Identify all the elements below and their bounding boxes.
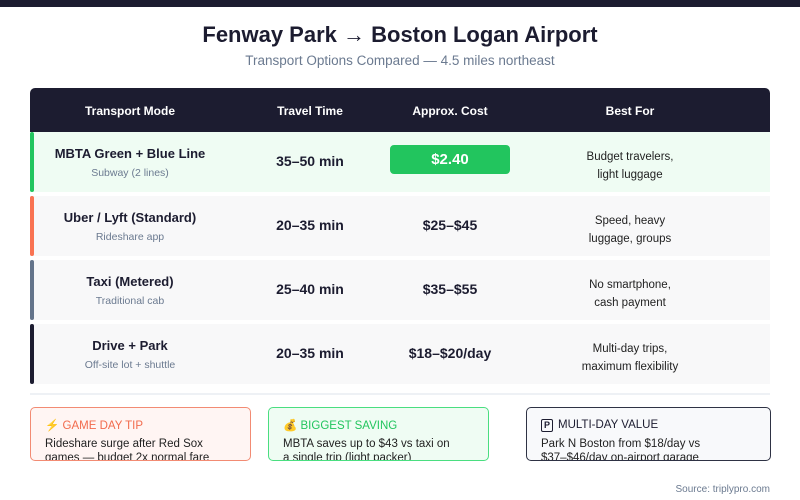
callout: game day tip bbox=[30, 407, 251, 461]
row: Drive bbox=[30, 324, 770, 384]
cost badge bbox=[390, 145, 510, 174]
row: MBTA: 35–50 min bbox=[276, 153, 344, 169]
callout: game day tip: ⚡ GAME DAY TIP bbox=[45, 420, 143, 432]
table header: Travel Time bbox=[277, 104, 343, 118]
callout: multi-day value: P bbox=[544, 420, 550, 430]
callout: multi-day value: MULTI-DAY VALUE bbox=[558, 419, 658, 431]
table header: Approx. Cost bbox=[412, 104, 488, 118]
title: Fenway Park → Boston Logan Airport bbox=[202, 22, 598, 47]
row: Taxi: Traditional cab bbox=[96, 295, 164, 307]
table header bbox=[30, 88, 770, 132]
row: Uber: Rideshare app bbox=[96, 231, 164, 243]
row: Drive: maximum flexibility bbox=[582, 361, 678, 373]
row: Uber: Uber / Lyft (Standard) bbox=[64, 210, 196, 225]
row: MBTA: MBTA Green + Blue Line bbox=[55, 146, 205, 161]
callout: biggest saving: 💰 BIGGEST SAVING bbox=[283, 420, 397, 432]
top bar bbox=[0, 0, 800, 7]
row: Drive: 20–35 min bbox=[276, 345, 344, 361]
row: Uber: $25–$45 bbox=[423, 217, 477, 233]
row: MBTA: Budget travelers, bbox=[587, 151, 673, 163]
row: MBTA: light luggage bbox=[597, 169, 663, 181]
row: Taxi bbox=[30, 260, 770, 320]
row: Drive: Multi-day trips, bbox=[593, 343, 667, 355]
row: Drive: $18–$20/day bbox=[409, 345, 491, 361]
source: Source: triplypro.com bbox=[676, 484, 770, 495]
row: Uber: luggage, groups bbox=[589, 233, 671, 245]
subtitle: Transport Options Compared — 4.5 miles northeast bbox=[245, 53, 555, 68]
table header: Transport Mode bbox=[85, 104, 175, 118]
row: MBTA: Subway (2 lines) bbox=[91, 167, 169, 179]
cost badge: $2.40 bbox=[431, 151, 469, 168]
row: Taxi: $35–$55 bbox=[423, 281, 477, 297]
row: Taxi: Taxi (Metered) bbox=[86, 274, 174, 289]
callout: biggest saving bbox=[268, 407, 489, 461]
row: MBTA bbox=[30, 132, 770, 192]
row: Taxi: cash payment bbox=[594, 297, 666, 309]
row: Taxi: 25–40 min bbox=[276, 281, 344, 297]
row: Uber bbox=[30, 196, 770, 256]
table header: Best For bbox=[606, 104, 654, 118]
row: Uber: Speed, heavy bbox=[595, 215, 665, 227]
row: Taxi: No smartphone, bbox=[589, 279, 671, 291]
row: Drive: Drive + Park bbox=[92, 338, 168, 353]
callout: multi-day value bbox=[526, 407, 771, 461]
row: Drive: Off-site lot + shuttle bbox=[85, 359, 175, 371]
row: Uber: 20–35 min bbox=[276, 217, 344, 233]
